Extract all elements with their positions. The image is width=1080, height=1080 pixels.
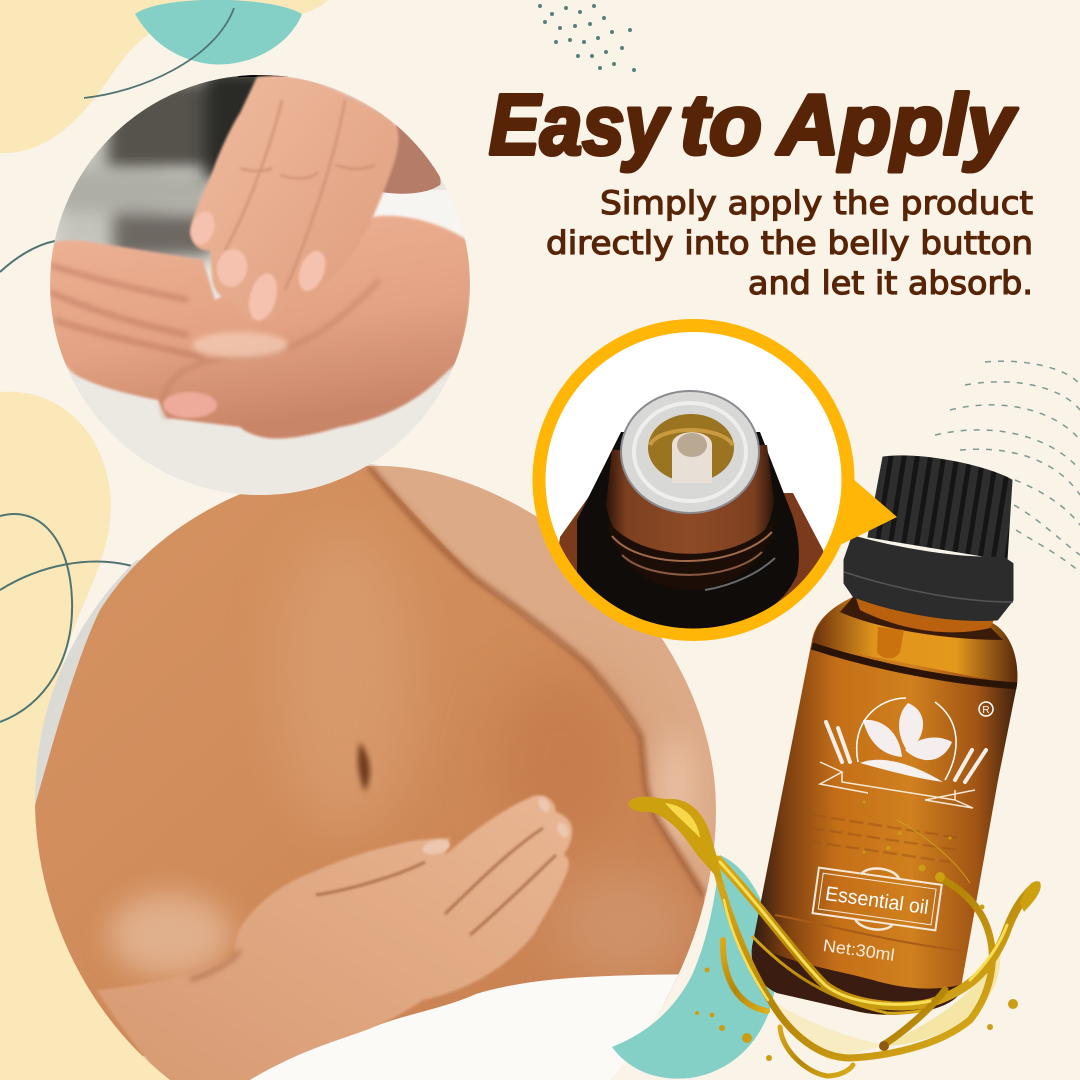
oil splash xyxy=(628,797,1041,1076)
registered mark: R xyxy=(982,705,990,716)
dots: top speckle xyxy=(538,4,636,72)
title xyxy=(489,78,1018,173)
description text xyxy=(546,184,1033,302)
towel xyxy=(250,974,678,1080)
title: Apply xyxy=(776,78,1018,173)
title: to xyxy=(680,78,762,173)
title: Easy xyxy=(489,78,670,173)
oil pool xyxy=(192,332,288,358)
callout pointer xyxy=(840,478,897,545)
finger separations xyxy=(50,265,205,358)
blob: top-left yellow xyxy=(0,0,328,153)
bottle cap xyxy=(868,456,1012,560)
blob: left yellow xyxy=(0,392,175,1080)
description text: directly into the belly button xyxy=(546,224,1033,262)
blob: top teal xyxy=(135,0,302,64)
hand on belly xyxy=(97,795,572,1080)
black collar xyxy=(577,432,799,632)
thin thread xyxy=(897,820,970,883)
fingernails xyxy=(421,796,571,857)
oil strand highlights xyxy=(720,862,1007,1004)
background hand xyxy=(380,125,441,194)
threaded neck xyxy=(606,445,774,554)
belly xyxy=(28,466,710,1060)
line: top curve xyxy=(84,8,234,98)
description text: and let it absorb. xyxy=(748,264,1033,302)
photo: belly massage xyxy=(20,466,730,1080)
description text: Simply apply the product xyxy=(600,184,1033,222)
upper hand fingers xyxy=(190,76,399,322)
knuckle lines xyxy=(225,100,375,290)
arm crease xyxy=(369,466,704,895)
line: left loops xyxy=(0,241,132,722)
navel xyxy=(358,742,370,792)
sealing ring xyxy=(621,391,759,513)
amber shoulder xyxy=(559,493,824,628)
faint small print xyxy=(808,815,960,862)
arm behind belly xyxy=(369,466,716,1000)
cap collar xyxy=(845,537,1012,619)
dashes: right speckle xyxy=(935,361,1080,572)
oil droplets xyxy=(695,800,1018,1061)
photo: hands applying oil xyxy=(48,70,480,500)
bottle body xyxy=(752,597,1017,1015)
product label: Essential oil xyxy=(824,883,930,919)
dark base xyxy=(752,944,959,1015)
dropper stem xyxy=(672,432,712,483)
glass shoulder xyxy=(812,597,1017,685)
finger gaps xyxy=(316,828,556,935)
nails xyxy=(163,209,330,418)
blob: bottom teal xyxy=(612,855,776,1079)
registered mark xyxy=(979,702,993,716)
neck and dropper xyxy=(855,595,995,632)
callout: bottle dropper close-up xyxy=(539,326,897,650)
logo xyxy=(820,698,986,808)
product label xyxy=(807,860,943,970)
bottle xyxy=(745,456,1020,1020)
oil strand tips xyxy=(1020,881,1041,912)
product label: Net:30ml xyxy=(822,936,896,965)
thumb shading xyxy=(163,280,380,418)
lower palm and fingers xyxy=(48,216,471,439)
pale oil film xyxy=(883,950,1000,1047)
oil head blob xyxy=(628,797,722,885)
oil strands xyxy=(716,860,1034,1076)
